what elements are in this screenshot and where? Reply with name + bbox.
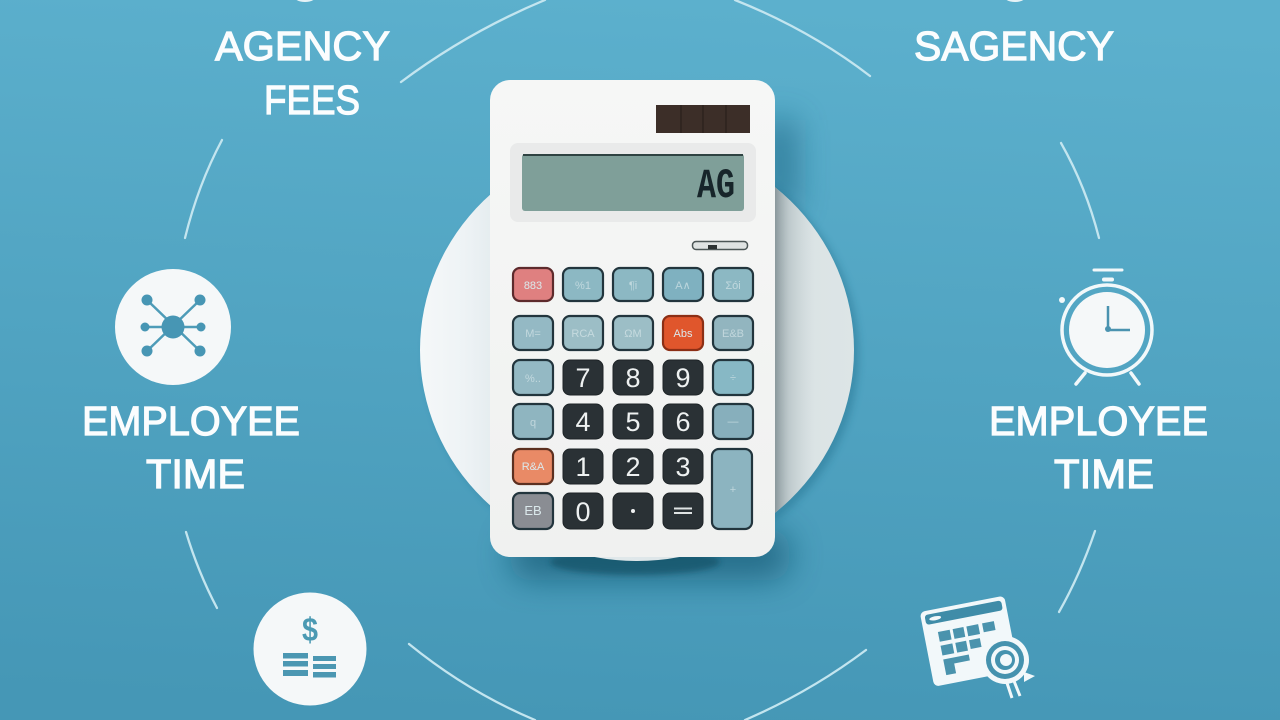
heading: employee time left [82,398,300,497]
icon: calendar with target [920,596,1035,698]
number key digits: 0 [575,497,591,527]
display bezel [510,143,756,222]
heading: agency fees: AGENCY [215,23,390,69]
function key labels row 2 [525,328,744,340]
function key labels row 1: Σói [725,280,741,292]
heading: sagency: SAGENCY [914,23,1114,69]
function key labels row 1: A∧ [675,280,691,292]
side keys [513,360,753,529]
function key labels row 2: RCA [571,328,595,340]
number key digits: 1 [575,452,591,482]
icon: dollar stack [254,592,366,706]
small key labels: ÷ [730,372,736,384]
function keys row 2 [513,316,753,350]
slide switch [692,242,748,250]
number key digits: 8 [625,363,641,393]
small key labels: R&A [522,461,545,473]
function key labels row 1: ¶i [629,280,637,292]
white disc plate [420,187,854,561]
number keys [563,360,703,529]
number key digits: 9 [675,363,691,393]
number key digits: 3 [675,452,691,482]
drop shadow [425,120,859,580]
function key labels row 2: Abs [674,328,693,340]
heading: employee time left: TIME [146,451,245,497]
heading: employee time right: TIME [1054,451,1154,497]
function key labels row 2: E&B [722,328,744,340]
number key digits: 7 [575,363,591,393]
display: AG [697,162,735,210]
small key labels: %.. [525,373,541,385]
display [522,154,744,211]
heading: employee time left: EMPLOYEE [82,398,300,444]
number key digits: 4 [575,407,591,437]
calculator body [490,80,775,557]
small key labels: q [530,417,536,429]
icon: alarm clock [1059,270,1152,384]
function key labels row 1: %1 [575,280,591,292]
solar panel [656,105,750,133]
number key digits: 6 [675,407,691,437]
number key digits: 5 [625,407,641,437]
function key labels row 1 [524,280,741,292]
function key labels row 1: 883 [524,280,542,292]
icon: dollar stack: $ [302,611,318,648]
top-right icon remnant [1003,0,1027,2]
circular ring arcs [185,0,1099,720]
heading: agency fees [215,23,390,123]
small key labels: — [728,416,738,428]
small key labels: EB [524,503,542,518]
calculator [490,80,775,557]
function keys row 1 [513,268,753,301]
heading: employee time right [989,398,1208,497]
function key labels row 2: M= [525,328,541,340]
heading: agency fees: FEES [264,77,360,123]
small key labels [522,372,738,518]
number key digits [575,363,692,527]
heading: employee time right: EMPLOYEE [989,398,1208,444]
top-left icon remnant [293,0,317,2]
icon: network [115,269,231,385]
number key digits: 2 [625,452,641,482]
small key labels: + [730,484,736,496]
function key labels row 2: ΩM [624,328,642,340]
